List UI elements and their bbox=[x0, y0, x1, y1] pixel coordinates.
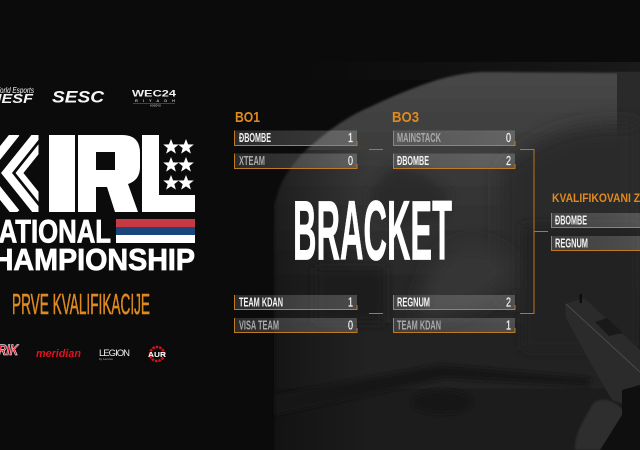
logo: AUR gear bbox=[148, 347, 167, 361]
letter L bbox=[142, 135, 195, 212]
logo: Legion: LEGION bbox=[99, 348, 130, 359]
team row: DBOMBE: ÐBOMBE bbox=[555, 214, 587, 228]
logo: WEC24 Riyadh: WEC24 bbox=[132, 88, 176, 98]
team row: REGNUM 2 bbox=[393, 295, 515, 310]
team row: TEAM KDAN 1 bbox=[393, 318, 515, 333]
team row: MAINSTACK 0 bbox=[393, 130, 515, 146]
team row: TEAM KDAN 1: TEAM KDAN bbox=[239, 296, 283, 310]
team row: VISA TEAM 0 bbox=[234, 318, 357, 333]
team row: DBOMBE 2 bbox=[393, 154, 515, 168]
team row: REGNUM 2: REGNUM bbox=[397, 296, 430, 310]
logo: WEC24 Riyadh bbox=[132, 88, 176, 108]
heading: BO3: BO3 bbox=[392, 109, 419, 126]
match: BO3 bottom bbox=[393, 295, 515, 333]
connector: bracket to qualified bbox=[520, 150, 548, 314]
team row: MAINSTACK 0: 0 bbox=[506, 131, 511, 145]
logo: AUR gear: AUR bbox=[148, 350, 167, 359]
team row: REGNUM: REGNUM bbox=[555, 236, 588, 250]
team row: TEAM KDAN 1: 1 bbox=[506, 318, 511, 332]
team row: REGNUM 2: 2 bbox=[506, 296, 511, 310]
logo: World Esports ESF bbox=[0, 86, 34, 106]
team row: VISA TEAM 0: 0 bbox=[348, 318, 353, 332]
text: PRVE KVALIFIKACIJE bbox=[12, 289, 150, 321]
team row: TEAM KDAN 1 bbox=[234, 295, 357, 310]
team row: XTEAM 0: XTEAM bbox=[239, 154, 265, 168]
qualified teams bbox=[551, 213, 640, 251]
team row: DBOMBE 1: 1 bbox=[348, 131, 353, 145]
team row: DBOMBE 1: ÐBOMBE bbox=[239, 131, 271, 145]
icon: K chevrons bbox=[0, 135, 38, 212]
icon: stars bbox=[163, 139, 194, 190]
sponsor logos bottom bbox=[0, 342, 167, 361]
team row: XTEAM 0 bbox=[234, 154, 357, 168]
match: BO1 bottom bbox=[234, 295, 357, 333]
team row: TEAM KDAN 1: TEAM KDAN bbox=[397, 318, 441, 332]
main logo: KIRL bbox=[0, 133, 195, 213]
sponsor logos top bbox=[0, 86, 176, 108]
letter R bbox=[78, 135, 140, 212]
team row: TEAM KDAN 1: 1 bbox=[348, 296, 353, 310]
icon: pistol in foreground bbox=[565, 294, 640, 450]
connector: BO1 to BO3 bottom bbox=[369, 312, 383, 314]
logo: SESC: SESC bbox=[52, 88, 105, 106]
team row: DBOMBE 1 bbox=[234, 130, 357, 146]
team row: XTEAM 0: 0 bbox=[348, 154, 353, 168]
team row: VISA TEAM 0: VISA TEAM bbox=[239, 318, 279, 332]
logo: Legion: by Lenovo bbox=[99, 357, 113, 361]
connector: BO1 to BO3 top bbox=[369, 148, 383, 150]
logo: WEC24 Riyadh: RIYADH bbox=[135, 98, 175, 103]
logo: meridian: meridian bbox=[36, 348, 81, 360]
team row: DBOMBE 2: ÐBOMBE bbox=[397, 154, 429, 168]
heading: BO1: BO1 bbox=[235, 109, 260, 126]
team row: DBOMBE 2: 2 bbox=[506, 154, 511, 168]
match: BO3 top bbox=[393, 130, 515, 168]
icon: Serbian flag stripes bbox=[116, 219, 195, 243]
match: BO1 top bbox=[234, 130, 357, 168]
team row: MAINSTACK 0: MAINSTACK bbox=[397, 131, 441, 145]
logo: WEC24 Riyadh: KOSOVO bbox=[150, 104, 161, 108]
letter I bbox=[49, 135, 75, 212]
